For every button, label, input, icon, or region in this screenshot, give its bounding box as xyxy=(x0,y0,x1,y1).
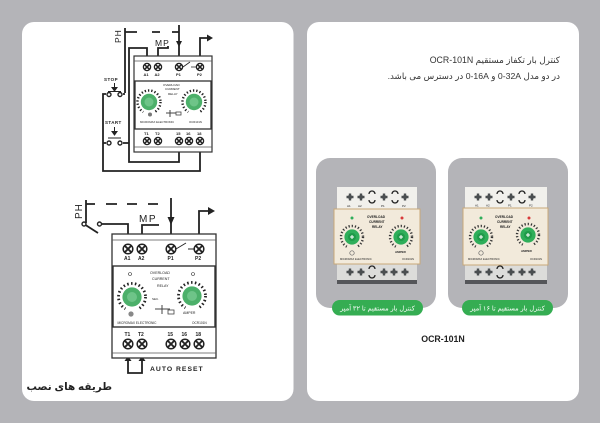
label: PH: PH xyxy=(74,203,85,219)
relay photo: MICROMAX ELECTRONIC xyxy=(340,257,372,261)
relay body: P1 xyxy=(168,256,174,262)
relay photo: AMPER xyxy=(395,250,407,254)
relay body: T1 xyxy=(124,332,131,338)
relay photo: P1 xyxy=(381,204,385,208)
relay photo: P2 xyxy=(529,204,533,208)
panel: product information xyxy=(307,22,579,401)
relay body: MICROMAX ELECTRONIC xyxy=(118,321,157,325)
description line 2: در دو مدل ⁦0-32A⁩ و ⁦0-16A⁩ در دسترس می باشد. xyxy=(388,71,560,81)
relay photo: P2 xyxy=(402,204,406,208)
label: MP: MP xyxy=(155,38,170,48)
description line 1: کنترل بار تکفاز مستقیم OCR-101N xyxy=(430,55,561,66)
relay photo xyxy=(463,187,548,284)
relay photo: A2 xyxy=(358,204,362,208)
relay body: 15 xyxy=(168,332,173,338)
relay body: OCR101N xyxy=(189,120,202,124)
relay body: CURRENT xyxy=(152,277,170,281)
relay body: AMPER xyxy=(183,311,196,315)
relay body: 15 xyxy=(176,131,181,136)
relay body: P2 xyxy=(197,72,203,77)
stop button xyxy=(104,77,122,96)
stop button: STOP xyxy=(104,77,118,82)
relay photo: RELAY xyxy=(500,225,511,229)
relay photo: A2 xyxy=(486,204,490,208)
label: MP: MP xyxy=(139,214,157,225)
relay body xyxy=(112,234,216,358)
wiring xyxy=(84,198,208,373)
relay photo: OVERLOAD xyxy=(367,215,386,219)
label: PH: PH xyxy=(113,29,123,43)
relay body: 16 xyxy=(186,131,191,136)
relay body: A1 xyxy=(144,72,149,77)
relay body: 18 xyxy=(196,332,201,338)
label pill: کنترل بار مستقیم تا ۳۲ آمپر xyxy=(339,304,416,312)
relay body: T2 xyxy=(155,131,160,136)
product model label: OCR-101N xyxy=(421,334,465,344)
relay photo: OVERLOAD xyxy=(495,215,514,219)
relay body: RELAY xyxy=(168,92,178,96)
diagram: auto reset wiring xyxy=(74,198,216,373)
panel: installation diagrams xyxy=(22,22,294,401)
relay photo: A1 xyxy=(347,204,351,208)
relay photo: CURRENT xyxy=(369,220,385,224)
relay body: RELAY xyxy=(157,284,169,288)
relay body xyxy=(134,56,212,152)
wire arrows xyxy=(124,207,215,361)
relay photo: A1 xyxy=(475,204,479,208)
relay body: 18 xyxy=(197,131,202,136)
start button xyxy=(105,120,122,145)
relay body: SEC. xyxy=(152,297,159,301)
relay body: 16 xyxy=(182,332,187,338)
relay body: OVERLOAD xyxy=(163,83,181,87)
diagram: stop/start wiring xyxy=(103,25,213,171)
label pill xyxy=(462,300,553,316)
heading: installation method: طریقه های نصب xyxy=(27,382,112,393)
product card: 16A xyxy=(448,158,568,316)
relay body: P1 xyxy=(176,72,182,77)
relay body: A2 xyxy=(138,256,145,262)
relay photo xyxy=(334,187,420,284)
relay body: T1 xyxy=(144,131,149,136)
switch contacts xyxy=(82,222,102,226)
relay photo: OCR101N xyxy=(402,257,414,261)
label pill: کنترل بار مستقیم تا ۱۶ آمپر xyxy=(469,304,546,312)
relay body: T2 xyxy=(138,332,144,338)
relay body: CURRENT xyxy=(165,87,180,91)
wire arrows xyxy=(176,34,213,47)
relay photo: P1 xyxy=(508,204,512,208)
product card: 32A xyxy=(316,158,436,316)
relay photo: CURRENT xyxy=(497,220,513,224)
relay body: A1 xyxy=(124,256,131,262)
relay body: OVERLOAD xyxy=(150,271,170,275)
relay body: OCR101N xyxy=(192,321,207,325)
label pill xyxy=(332,300,423,316)
relay photo: OCR101N xyxy=(530,257,542,261)
relay body: MICROMAX ELECTRONIC xyxy=(140,120,174,124)
start button: START xyxy=(105,120,122,125)
relay photo: RELAY xyxy=(372,225,383,229)
relay body: P2 xyxy=(195,256,201,262)
relay body: A2 xyxy=(154,72,160,77)
label: auto reset: AUTO RESET xyxy=(150,366,204,373)
relay photo: AMPER xyxy=(521,249,533,253)
wiring xyxy=(103,25,207,171)
relay photo: MICROMAX ELECTRONIC xyxy=(468,257,500,261)
